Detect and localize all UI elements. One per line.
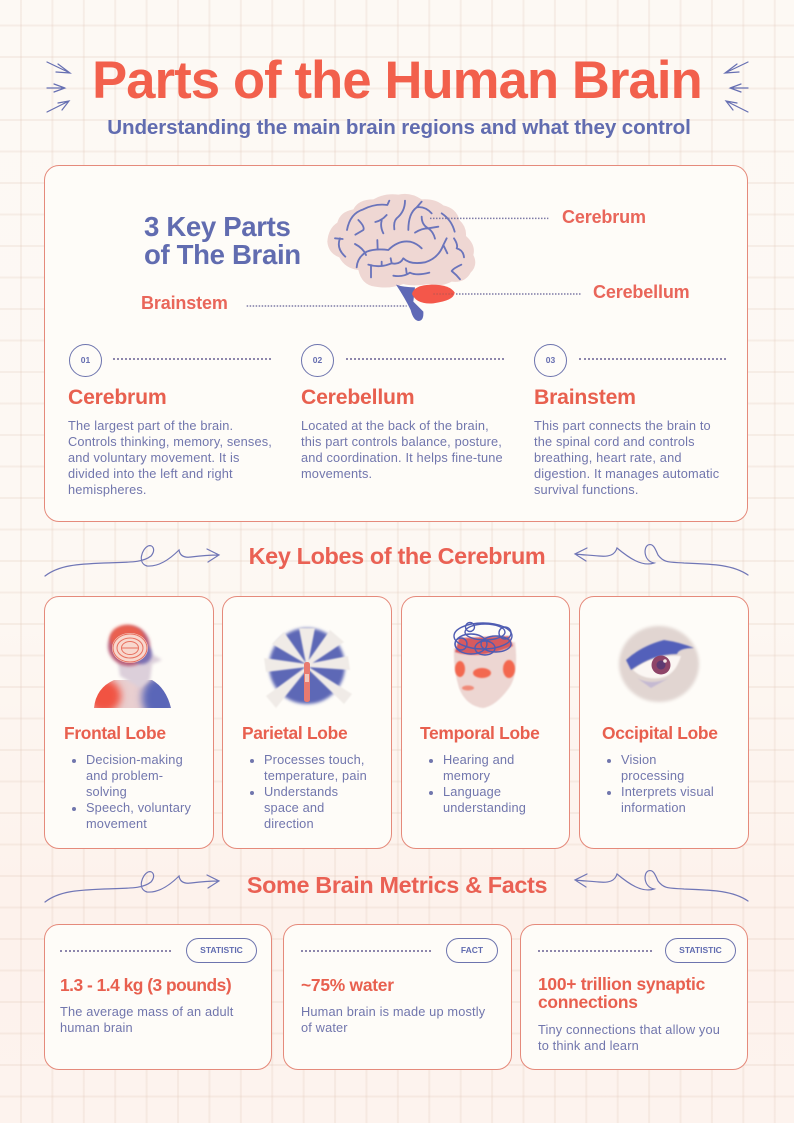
label: Brainstem: Brainstem [141,293,228,313]
text: Cerebellum description: this part controls balance, posture, [301,434,502,449]
text: water description: of water [301,1020,348,1035]
list: Frontal Lobe functions [72,752,191,831]
list: Parietal Lobe functions: Understands [264,784,338,799]
text: mass description: human brain [60,1020,133,1035]
text: Cerebellum description: and coordination. It helps fine-tune [301,450,503,465]
heading: 3 key parts [144,211,301,270]
text: Brainstem description: This part connects the brain to [534,418,711,433]
text: Brainstem description: survival functions. [534,482,639,497]
heading: Cerebrum: Cerebrum [68,386,166,409]
list: Frontal Lobe functions: solving [86,784,127,799]
list: Occipital Lobe functions: Interprets visual [621,784,714,799]
brain diagram [246,194,580,321]
illustration: hands pointing at figure [264,626,352,708]
column: 02 Cerebellum [301,344,504,481]
number badge 02: 02 [313,355,322,365]
text: synapses description: Tiny connections that allow you [538,1022,720,1037]
subtitle: Understanding the main brain regions and what they control [107,116,691,139]
list: Parietal Lobe functions: temperature, pain [264,768,367,783]
heading: 3 key parts: 3 Key Parts [144,211,290,242]
heading: Brainstem: Brainstem [534,386,636,409]
list: Temporal Lobe functions: Language [443,784,501,799]
list: Temporal Lobe functions: Hearing and [443,752,514,767]
heading: mass value: 1.3 - 1.4 kg (3 pounds) [60,975,231,995]
text: mass description [60,1004,234,1035]
panel: Parietal Lobe [222,596,392,849]
text: Cerebrum description: and voluntary movement. It is [68,450,240,465]
label: Cerebellum: Cerebellum [593,282,690,302]
title: Parts of the Human Brain [92,51,702,110]
text: mass description: The average mass of an adult [60,1004,234,1019]
badge: fact: FACT [461,945,483,955]
list: Frontal Lobe functions: movement [86,816,147,831]
list: Frontal Lobe functions: Decision-making [86,752,183,767]
text: Cerebrum description [68,418,272,497]
heading: Temporal Lobe: Temporal Lobe [420,723,539,743]
heading: Parietal Lobe: Parietal Lobe [242,723,347,743]
squiggle arrow: metrics right [574,870,749,902]
list: Occipital Lobe functions: Vision [621,752,657,767]
number badge 01: 01 [81,355,90,365]
squiggle arrow: lobes right [574,544,749,576]
list: Occipital Lobe functions: processing [621,768,684,783]
list: Temporal Lobe functions: memory [443,768,490,783]
heading: Cerebellum: Cerebellum [301,386,414,409]
illustration: eye [618,624,700,703]
squiggle arrow: metrics left [44,871,220,903]
text: water description [301,1004,486,1035]
number badge 03: 03 [546,355,555,365]
panel: Temporal Lobe [401,596,570,849]
illustration: face with scribbled mind [453,622,516,708]
label: Cerebrum: Cerebrum [562,207,646,227]
heading: 3 key parts: of The Brain [144,238,301,270]
badge: statistic [186,938,257,963]
column: 03 Brainstem [534,344,726,497]
column: 01 Cerebrum [68,344,272,497]
text: Cerebrum description: divided into the left and right [68,466,233,481]
list: Parietal Lobe functions [250,752,367,831]
icon: left arrow cluster [46,61,72,113]
list: Parietal Lobe functions: space and [264,800,324,815]
heading: synapses value: connections [538,992,638,1012]
panel: statistic mass [44,924,272,1070]
list: Frontal Lobe functions: and problem- [86,768,163,783]
list: Temporal Lobe functions: understanding [443,800,526,815]
text: Cerebellum description [301,418,503,481]
panel: Frontal Lobe [44,596,214,849]
text: Cerebrum description: The largest part of the brain. [68,418,233,433]
text: Cerebellum description: movements. [301,466,372,481]
illustration: head with brain [94,622,171,708]
text: Brainstem description: breathing, heart rate, and [534,450,682,465]
icon: right arrow cluster [723,61,749,113]
squiggle arrow: lobes left [44,545,220,577]
badge: fact [446,938,498,963]
heading: Some Brain Metrics & Facts: Some Brain Metrics & Facts [247,872,547,898]
panel: key parts [44,165,748,522]
text: Brainstem description [534,418,719,497]
text: Cerebellum description: Located at the back of the brain, [301,418,489,433]
text: Cerebrum description: hemispheres. [68,482,147,497]
badge: statistic: STATISTIC [679,945,722,955]
list: Occipital Lobe functions: information [621,800,686,815]
panel: fact water [283,924,512,1070]
heading: Frontal Lobe: Frontal Lobe [64,723,166,743]
text: Brainstem description: the spinal cord and controls [534,434,695,449]
panel: statistic synapses [520,924,748,1070]
text: synapses description: to think and learn [538,1038,639,1053]
number badge 02 [301,344,334,377]
list: Occipital Lobe functions [607,752,714,815]
list: Parietal Lobe functions: Processes touch, [264,752,365,767]
text: water description: Human brain is made up mostly [301,1004,485,1019]
number badge 01 [69,344,102,377]
text: synapses description [538,1022,720,1053]
list: Parietal Lobe functions: direction [264,816,314,831]
list: Frontal Lobe functions: Speech, voluntary [86,800,191,815]
list: Temporal Lobe functions [429,752,526,815]
number badge 03 [534,344,567,377]
heading: Key Lobes of the Cerebrum: Key Lobes of the Cerebrum [249,543,545,569]
heading: water value: ~75% water [301,975,394,995]
badge: statistic [665,938,736,963]
text: Cerebrum description: Controls thinking, memory, senses, [68,434,272,449]
badge: statistic: STATISTIC [200,945,243,955]
text: Brainstem description: digestion. It manages automatic [534,466,719,481]
heading: Occipital Lobe: Occipital Lobe [602,723,718,743]
panel: Occipital Lobe [579,596,749,849]
heading: synapses value: 100+ trillion synaptic [538,974,705,994]
heading: synapses value [538,974,705,1012]
